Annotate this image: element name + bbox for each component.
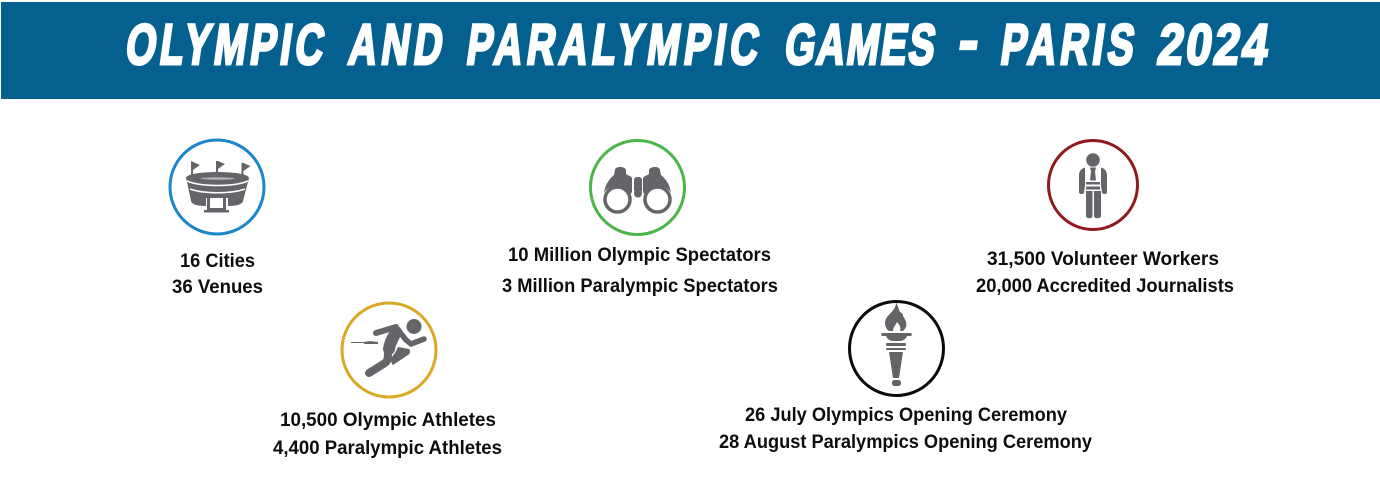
title: - <box>955 9 983 73</box>
text: volunteers and journalists <box>976 249 1234 297</box>
text: cities and venues <box>172 251 263 298</box>
text: ceremonies <box>719 405 1092 453</box>
icon: volunteer worker <box>1048 140 1138 230</box>
text: athletes: 4,400 Paralympic Athletes <box>273 438 502 459</box>
text: athletes <box>273 410 502 459</box>
icon: torch <box>850 302 944 396</box>
title: PARIS <box>997 14 1139 77</box>
text: ceremonies: 26 July Olympics Opening Ceremony <box>745 405 1067 426</box>
icon: runner <box>342 303 436 397</box>
title: 2024 <box>1154 14 1273 77</box>
icon: binoculars <box>590 140 684 234</box>
text: spectators: 3 Million Paralympic Spectators <box>502 276 778 297</box>
title: GAMES <box>781 14 940 77</box>
title: AND <box>345 14 447 77</box>
title banner <box>1 2 1380 99</box>
text: spectators <box>502 245 778 297</box>
text: spectators: 10 Million Olympic Spectators <box>508 245 771 266</box>
panel: athletes <box>273 303 502 459</box>
icon: stadium <box>170 140 264 234</box>
title: PARALYMPIC <box>463 14 763 77</box>
text: cities and venues: 36 Venues <box>172 277 263 298</box>
text: cities and venues: 16 Cities <box>180 251 255 272</box>
text: volunteers and journalists: 31,500 Volunteer Workers <box>987 249 1219 270</box>
title <box>122 9 1273 77</box>
panel: spectators <box>502 140 778 297</box>
text: athletes: 10,500 Olympic Athletes <box>280 410 496 431</box>
text: volunteers and journalists: 20,000 Accredited Journalists <box>976 276 1234 297</box>
panel: volunteers <box>976 140 1234 297</box>
text: ceremonies: 28 August Paralympics Opening Ceremony <box>719 432 1092 453</box>
title: OLYMPIC <box>122 14 328 77</box>
panel: ceremonies <box>719 302 1092 453</box>
panel: venues <box>170 140 264 298</box>
